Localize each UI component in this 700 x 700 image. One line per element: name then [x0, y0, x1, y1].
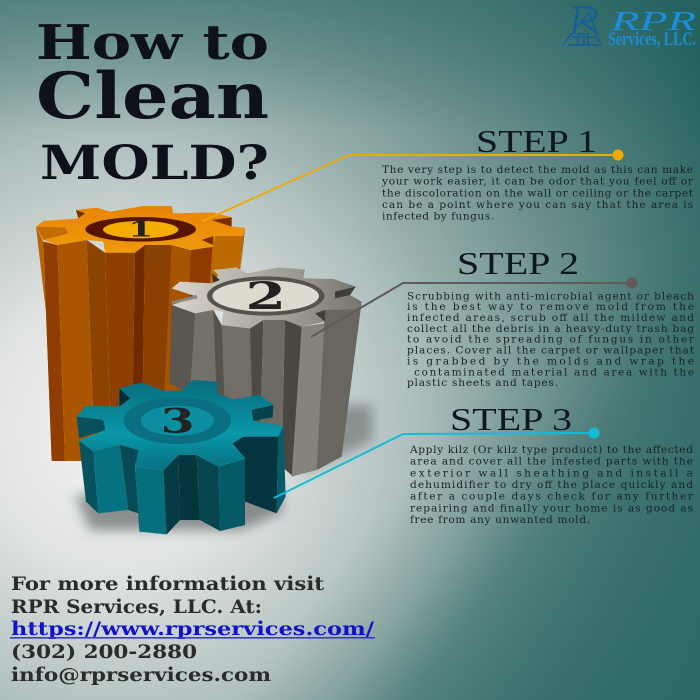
contact information: For more information visit	[11, 573, 324, 595]
gear 1 side faces	[36, 227, 245, 461]
step 2 text: is the best way to remove mold from the	[407, 301, 694, 313]
step 3 text: area and cover all the infested parts with the	[410, 456, 693, 468]
step 2 heading: STEP 2	[457, 245, 579, 281]
icon: house with R	[563, 7, 601, 45]
step 1 text: can be a point where you can say that the area is	[382, 199, 693, 211]
website link: https://www.rprservices.com/	[11, 618, 374, 640]
step 1 text: The very step is to detect the mold as this can make	[382, 164, 693, 176]
title: MOLD?	[40, 136, 269, 191]
step 1 text: infected by fungus.	[382, 211, 494, 223]
number badge 1	[85, 217, 196, 243]
logo text: RPR	[609, 6, 697, 36]
contact information: (302) 200-2880	[11, 641, 197, 663]
number badge 3: 3	[161, 402, 195, 442]
title: Clean	[36, 59, 269, 134]
step 3 text: exterior wall sheathing and install a	[410, 467, 694, 479]
step 1 text	[381, 164, 694, 223]
contact information: info@rprservices.com	[11, 664, 271, 686]
step 3 text: dehumidifier to dry off the place quickly and	[410, 479, 693, 491]
step 1 text: the discoloration on the wall or ceiling or the carpet	[382, 187, 694, 199]
number badge 1: 1	[128, 218, 153, 243]
title: How to	[36, 15, 269, 71]
contact information	[10, 573, 375, 686]
number badge 3	[124, 397, 231, 444]
gear 2: gray column	[169, 267, 362, 477]
title	[36, 15, 269, 191]
gear 2 top face	[172, 267, 362, 328]
gear 2 side faces	[169, 302, 362, 477]
gear 1 top face	[36, 206, 245, 253]
connector: step 2	[311, 278, 638, 337]
gear 1: orange column	[36, 206, 245, 461]
step 3 text: after a couple days check for any further	[410, 491, 694, 503]
step 2 text: contaminated material and area with the	[414, 366, 694, 378]
connector: step 3	[274, 428, 600, 498]
step 2 text: is grabbed by the molds and wrap the	[407, 355, 694, 367]
contact information: RPR Services, LLC. At:	[11, 596, 262, 618]
step 2 text: collect all the debris in a heavy-duty trash bag	[407, 323, 694, 335]
step 2 text: places. Cover all the carpet or wallpaper that	[407, 345, 695, 357]
step 2 text: to avoid the spreading of fungus in other	[407, 334, 695, 346]
number badge 2	[207, 274, 324, 318]
step 2 text: infected areas, scrub off all the mildew and	[407, 312, 694, 324]
step 2 text: plastic sheets and tapes.	[407, 377, 558, 389]
number badge 2: 2	[245, 274, 286, 318]
step 3 text	[409, 444, 694, 526]
step 3 text: free from any unwanted mold.	[410, 514, 590, 526]
step 3 text: repairing and finally your home is as good as	[410, 502, 693, 514]
logo: RPR Services, LLC.	[563, 6, 697, 50]
shadows under gears	[75, 405, 372, 530]
step 1 text: your work easier, it can be odor that you feel off or	[381, 176, 694, 188]
logo text	[608, 6, 697, 50]
step 3 heading: STEP 3	[450, 401, 572, 437]
step 2 text: Scrubbing with anti-microbial agent or bleach	[407, 290, 694, 302]
gear 3: teal	[77, 380, 286, 534]
gear 3 side faces	[79, 426, 286, 534]
connector: step 1	[203, 150, 624, 221]
gear 3 top face	[77, 380, 283, 470]
step 1 heading: STEP 1	[476, 123, 597, 159]
step 2 text	[407, 290, 695, 389]
step 3 text: Apply kilz (Or kilz type product) to the affected	[409, 444, 693, 456]
